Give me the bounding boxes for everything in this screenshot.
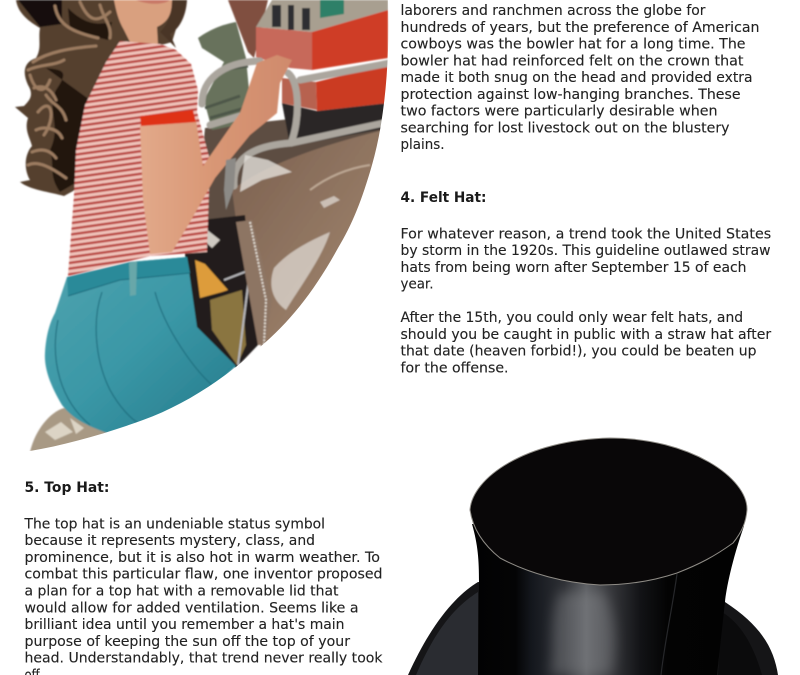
felt hat body text: After the 15th, you could only wear felt hats, and bbox=[400, 310, 743, 326]
hair bbox=[15, 0, 185, 196]
face and neck bbox=[114, 0, 172, 45]
satin seam bbox=[661, 574, 677, 675]
felt hat body text: by storm in the 1920s. This guideline outlawed straw bbox=[400, 243, 770, 259]
dark wheel well with yellow panel bbox=[183, 215, 258, 368]
belt loop bbox=[129, 261, 137, 296]
sleeve cuff bbox=[140, 110, 196, 126]
felt hat body text: that date (heaven forbid!), you could be beaten up bbox=[400, 344, 756, 360]
top right body text: two factors were particularly desirable when bbox=[400, 104, 718, 120]
top right body text: cowboys was the bowler hat for a long time. The bbox=[400, 36, 746, 52]
jeans bbox=[45, 257, 236, 433]
red crate bbox=[256, 27, 312, 70]
heading: Top Hat: 5. Top Hat: bbox=[24, 480, 110, 496]
hat crown side bbox=[472, 524, 744, 675]
silver bumper bbox=[30, 408, 115, 452]
top hat body text: purpose of keeping the sun off the top of your bbox=[24, 634, 350, 650]
striped shirt bbox=[68, 41, 210, 276]
felt hat body text: should you be caught in public with a straw hat after bbox=[400, 327, 771, 343]
top hat body text: because it represents mystery, class, and bbox=[24, 533, 315, 549]
photo: black top hat bbox=[408, 438, 778, 675]
felt hat body text: For whatever reason, a trend took the United States bbox=[400, 226, 771, 242]
top hat body text: prominence, but it is also hot in warm weather. To bbox=[24, 550, 380, 566]
felt hat body text: year. bbox=[400, 276, 434, 292]
arm bbox=[140, 55, 292, 254]
satin highlight bbox=[550, 592, 615, 675]
shadow under crate bbox=[281, 102, 384, 139]
car trim strip bbox=[235, 220, 262, 346]
top right body text: made it both snug on the head and provided extra bbox=[400, 70, 752, 86]
hat top bbox=[470, 438, 747, 585]
jeans seams bbox=[55, 273, 212, 425]
top right body text bbox=[400, 3, 760, 153]
car body bbox=[232, 128, 392, 350]
top right body text: plains. bbox=[400, 137, 444, 153]
car highlights bbox=[240, 155, 340, 310]
top hat body text: a plan for a top hat with a removable lid that bbox=[24, 584, 339, 600]
brown fabric behind box bbox=[228, 0, 268, 58]
dark area behind car bbox=[203, 118, 380, 220]
chrome rails bbox=[202, 61, 390, 186]
top right body text: laborers and ranchmen across the globe for bbox=[400, 3, 706, 19]
top hat body text: combat this particular flaw, one inventor proposed bbox=[24, 567, 382, 583]
top hat body text: head. Understandably, that trend never really took bbox=[24, 651, 383, 667]
bracket bbox=[224, 158, 236, 210]
felt hat body text: hats from being worn after September 15 of each bbox=[400, 260, 746, 276]
felt hat body text: for the offense. bbox=[400, 360, 508, 376]
top hat body text: would allow for added ventilation. Seems like a bbox=[24, 600, 359, 616]
top right body text: bowler hat had reinforced felt on the crown that bbox=[400, 53, 744, 69]
bottles in crate bbox=[256, 0, 388, 32]
top hat body text: The top hat is an undeniable status symbol bbox=[23, 516, 325, 532]
top hat body text bbox=[23, 516, 383, 675]
hair right of neck bbox=[160, 0, 187, 48]
hat brim bbox=[408, 582, 778, 675]
photo: woman leaning on vintage car bbox=[15, 0, 392, 452]
green engine stack bbox=[198, 22, 252, 130]
felt hat body text bbox=[400, 226, 771, 376]
top hat body text: brilliant idea until you remember a hat's main bbox=[24, 617, 344, 633]
top right body text: hundreds of years, but the preference of American bbox=[400, 20, 760, 36]
top right body text: searching for lost livestock out on the blustery bbox=[400, 120, 730, 136]
jeans waistband bbox=[67, 257, 190, 296]
top right body text: protection against low-hanging branches. These bbox=[400, 87, 740, 103]
lips bbox=[136, 0, 170, 4]
heading: Felt Hat: 4. Felt Hat: bbox=[400, 190, 486, 206]
